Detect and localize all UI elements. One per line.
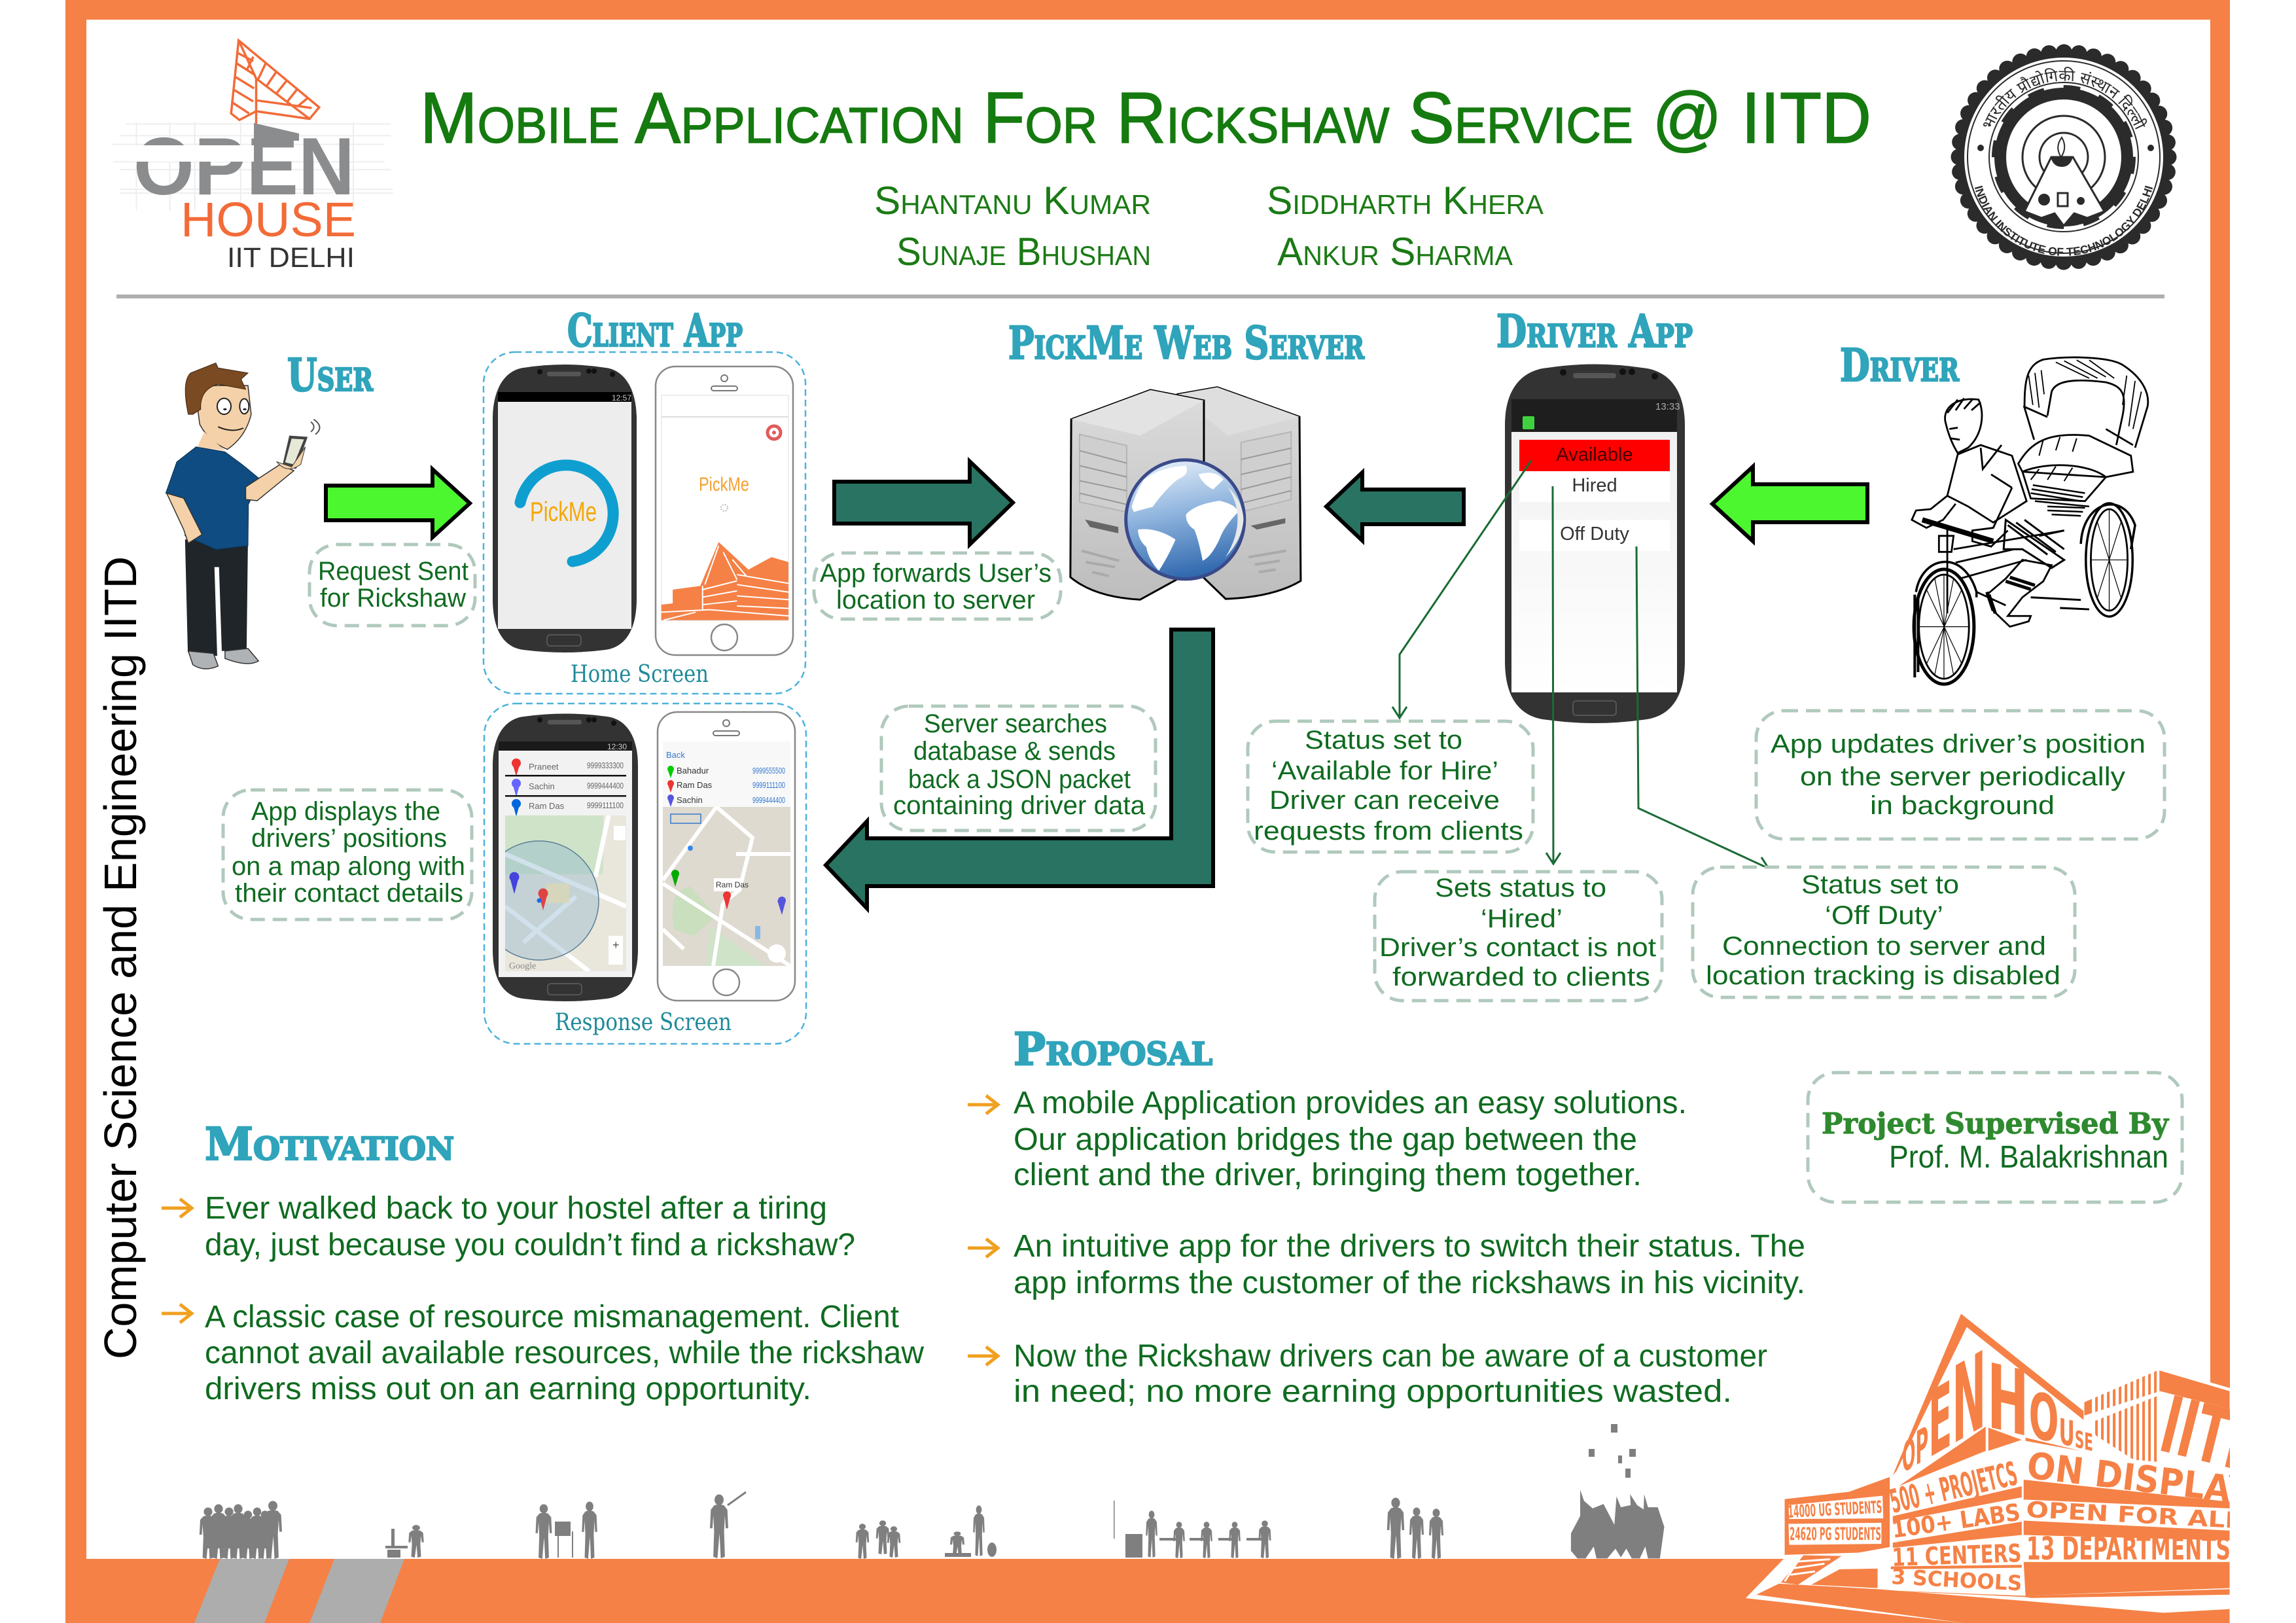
lowered arm and pocket hand <box>167 493 202 543</box>
authors: Shantanu Kumar <box>874 179 1151 223</box>
authors: Ankur Sharma <box>1277 230 1513 274</box>
android phone: home screen: PickMe <box>530 496 597 527</box>
silhouette: lab pair <box>536 1501 597 1559</box>
status button: hired: Hired <box>1572 475 1617 496</box>
silhouette: crowd <box>200 1501 282 1559</box>
arrow bullet <box>968 1347 998 1365</box>
driver list: 9999333300 <box>587 760 624 770</box>
heading: User: User <box>287 349 374 402</box>
contact list <box>666 750 785 807</box>
building lettering: 14000 UG STUDENTS <box>1788 1497 1882 1522</box>
frame <box>1939 528 2064 613</box>
callout: status available: Driver can receive <box>1269 786 1500 815</box>
ribbed wall <box>2092 1396 2159 1462</box>
silhouette: person at desk <box>385 1525 424 1558</box>
building lettering <box>1788 1327 2276 1596</box>
proposal point one <box>1014 1086 1687 1192</box>
callout: project supervisor <box>1808 1073 2182 1202</box>
callout: status available: ‘Available for Hire’ <box>1271 757 1498 785</box>
map <box>663 807 790 966</box>
map: + <box>612 938 620 952</box>
back right tower <box>1178 387 1301 599</box>
driver list <box>505 758 626 817</box>
arrow: client app to server <box>834 461 1013 544</box>
driver list: Praneet <box>529 762 559 772</box>
elbow arrow: server back to client <box>826 630 1213 908</box>
heading: PickMe Web Server: PickMe Web Server <box>1008 317 1365 370</box>
driver list: 9999111100 <box>587 800 624 810</box>
canopy <box>2024 357 2148 448</box>
building lettering: 11 CENTERS <box>1892 1539 2022 1572</box>
proposal point three: Now the Rickshaw drivers can be aware of a customer <box>1014 1339 1767 1374</box>
proposal point three <box>1014 1339 1767 1409</box>
status button: available <box>1519 440 1670 471</box>
section: motivation <box>162 1118 924 1406</box>
header divider <box>116 294 2164 298</box>
status button: off duty <box>1519 520 1670 551</box>
map <box>505 815 626 971</box>
building lettering: ON DISPLAY <box>2024 1444 2255 1514</box>
iPhone: home screen <box>656 366 793 655</box>
building lettering: 3 SCHOOLS <box>1891 1564 2022 1596</box>
motivation point one: day, just because you couldn’t find a rickshaw? <box>205 1228 855 1262</box>
contact list: Ram Das <box>677 780 713 790</box>
callout: app displays: drivers’ positions <box>251 824 447 853</box>
IIT Delhi seal: INDIAN INSTITUTE OF TECHNOLOGY DELHI <box>1975 186 2153 256</box>
callout: app updates <box>1756 711 2164 839</box>
authors: Siddharth Khera <box>1267 179 1544 223</box>
right block bands <box>2024 1480 2230 1508</box>
android phone: response screen <box>480 713 638 1001</box>
arrow: driver app to server <box>1326 473 1464 541</box>
IIT DELHI wordmark: IIT DELHI <box>227 242 355 274</box>
callout: status available <box>1248 721 1533 852</box>
motivation point one <box>205 1191 855 1262</box>
driver list: Sachin <box>529 781 555 791</box>
callout: project supervisor: Prof. M. Balakrishnan <box>1889 1140 2168 1175</box>
callout: app updates: App updates driver’s position <box>1771 730 2146 758</box>
connector: hired <box>1546 486 1561 864</box>
proposal point one: client and the driver, bringing them together. <box>1014 1158 1642 1192</box>
building lettering: 100+ LABS <box>1890 1499 2022 1544</box>
callout: status off duty: location tracking is disabled <box>1706 961 2060 990</box>
front left tower <box>1070 390 1204 599</box>
IIT Delhi seal: भारतीय प्रौद्योगिकी संस्थान दिल्ली <box>1983 67 2147 130</box>
driver shorts and leg <box>2004 520 2064 568</box>
vertical department label: Computer Science and Engineering IITD <box>95 556 146 1359</box>
callout: request sent: Request Sent <box>318 557 468 586</box>
hair <box>185 363 248 414</box>
callout: app displays: App displays the <box>251 797 440 826</box>
proposal point two <box>1014 1229 1805 1300</box>
phone <box>283 436 308 469</box>
icon: logo kite roof <box>231 41 319 135</box>
eyes and mouth <box>217 399 231 414</box>
callout: project supervisor: Project Supervised By <box>1822 1107 2169 1141</box>
callout: app updates: on the server periodically <box>1800 762 2125 791</box>
panel: home screen <box>484 352 805 694</box>
callout: server searches: database & sends <box>913 737 1116 766</box>
front wheel <box>1914 569 1974 684</box>
android phone: response screen: 12:30 <box>607 742 627 751</box>
heading: Driver App: Driver App <box>1496 306 1693 358</box>
callout: app displays: their contact details <box>235 879 463 908</box>
driver head <box>1945 399 1982 453</box>
grey footer stripes <box>194 1559 404 1623</box>
callout: status hired: ‘Hired’ <box>1481 904 1563 933</box>
heading: Driver: Driver <box>1840 340 1960 392</box>
proposal point two: app informs the customer of the rickshaws in his vicinity. <box>1014 1266 1805 1300</box>
building lettering: HOUSE <box>1987 1345 2093 1473</box>
building lettering: 500 + PROJETCS <box>1886 1455 2021 1521</box>
callout: app forwards <box>814 553 1061 619</box>
driver app phone: 13:33 <box>1655 401 1680 412</box>
silhouette: three students <box>1387 1498 1443 1559</box>
icon: user with phone <box>166 363 320 669</box>
motivation point one: Ever walked back to your hostel after a tiring <box>205 1191 827 1226</box>
callout: server searches: back a JSON packet <box>908 765 1131 794</box>
footer building illustration <box>1746 1313 2276 1623</box>
ground and plaza <box>1756 1584 2230 1623</box>
building lettering: 24620 PG STUDENTS <box>1790 1524 1881 1544</box>
OPEN wordmark: OPEN <box>133 122 355 212</box>
heading: Client App: Client App <box>567 305 743 357</box>
arrow: driver to driver app <box>1712 467 1867 541</box>
driver torso <box>1947 445 2026 522</box>
caption: response screen: Response Screen <box>555 1009 732 1036</box>
globe <box>1126 460 1245 579</box>
silhouette: readers <box>945 1505 997 1557</box>
arrow bullet <box>968 1239 998 1257</box>
contact list: 9999111100 <box>752 780 785 790</box>
icon: orange campus building <box>662 542 788 620</box>
proposal point two: An intuitive app for the drivers to switch their status. The <box>1014 1229 1805 1264</box>
icon: rickshaw driver line art <box>1912 357 2148 684</box>
callout: server searches <box>881 706 1156 830</box>
callout: status available: Status set to <box>1305 726 1462 755</box>
silhouette: lecturer pointing <box>710 1492 746 1558</box>
HOUSE wordmark: HOUSE <box>181 192 356 247</box>
lower block <box>1811 1569 1878 1588</box>
driver app phone <box>1505 364 1685 723</box>
motivation point two: drivers miss out on an earning opportunity. <box>205 1372 811 1406</box>
steps <box>1781 1556 1841 1585</box>
contact list: Back <box>666 750 685 760</box>
contact list: Bahadur <box>677 766 709 776</box>
motivation point two <box>205 1300 924 1406</box>
left block bands <box>1893 1486 2022 1522</box>
silhouette: graduates throwing caps <box>1571 1424 1665 1558</box>
android phone: home screen: 12:57 <box>612 393 631 402</box>
contact list: 9999444400 <box>752 795 785 805</box>
rear wheel <box>2086 503 2132 616</box>
silhouette: running children <box>856 1520 900 1559</box>
iPhone: response screen <box>658 712 795 1001</box>
callout: server searches: containing driver data <box>893 791 1146 820</box>
proposal point three: in need; no more earning opportunities wasted. <box>1014 1374 1732 1409</box>
iPhone: home screen: PickMe <box>699 474 749 495</box>
arrow: user to client app <box>326 469 470 537</box>
silhouette: classroom <box>1114 1501 1271 1558</box>
arrow bullet <box>968 1096 998 1114</box>
seat <box>2018 435 2133 477</box>
map: Google <box>509 961 536 971</box>
connector: available <box>1392 461 1531 718</box>
shoes <box>188 649 258 669</box>
driver list: Ram Das <box>529 801 565 811</box>
android phone: home screen <box>493 365 637 652</box>
motivation point two: cannot avail available resources, while the rickshaw <box>205 1336 924 1370</box>
shirt <box>166 447 260 550</box>
arrow bullet <box>162 1304 192 1323</box>
status button: off duty: Off Duty <box>1560 524 1629 544</box>
proposal point one: A mobile Application provides an easy solutions. <box>1014 1086 1687 1120</box>
authors: Sunaje Bhushan <box>896 230 1151 274</box>
proposal point one: Our application bridges the gap between the <box>1014 1122 1637 1157</box>
callout: request sent <box>309 544 475 626</box>
callout: status hired <box>1375 872 1662 1001</box>
app icon <box>1523 416 1534 429</box>
status button: available: Available <box>1556 444 1633 465</box>
face <box>197 385 251 450</box>
neck <box>198 432 225 451</box>
status button: hired <box>1519 471 1670 502</box>
motivation point two: A classic case of resource mismanagement. Client <box>205 1300 899 1334</box>
callout: app displays <box>223 790 472 919</box>
connector: off duty <box>1636 546 1769 868</box>
building lettering: OPEN FOR ALL <box>2026 1497 2242 1534</box>
arm <box>245 465 294 501</box>
callout: server searches: Server searches <box>924 709 1107 738</box>
callout: status off duty <box>1693 867 2075 997</box>
map: Ram Das <box>716 880 749 889</box>
callout: status off duty: ‘Off Duty’ <box>1825 901 1943 930</box>
callout: status hired: forwarded to clients <box>1392 963 1650 991</box>
IIT Delhi seal <box>1951 45 2176 270</box>
footer silhouettes <box>200 1424 1664 1559</box>
right tower roof <box>2084 1370 2230 1416</box>
callout: app forwards: App forwards User’s <box>820 559 1051 588</box>
title: Mobile Application For Rickshaw Service @ IITD <box>420 78 1871 158</box>
callout: status hired: Sets status to <box>1435 874 1606 902</box>
arrow bullet <box>162 1199 192 1217</box>
callout: status off duty: Status set to <box>1801 870 1959 899</box>
white cut-out <box>1746 1382 2230 1623</box>
driver list: 9999444400 <box>587 781 624 791</box>
contact list: 9999555500 <box>752 766 785 776</box>
trousers <box>185 539 248 656</box>
callout: status available: requests from clients <box>1254 817 1523 846</box>
callout: request sent: for Rickshaw <box>320 584 466 613</box>
callout: app displays: on a map along with <box>232 852 465 881</box>
heading: motivation: Motivation <box>205 1118 454 1171</box>
contact list: Sachin <box>677 795 703 805</box>
callout: app forwards: location to server <box>836 586 1035 615</box>
left annex <box>1785 1477 1890 1555</box>
section: proposal <box>968 1024 1805 1409</box>
authors <box>874 179 1544 274</box>
peak frame <box>1893 1313 2083 1475</box>
callout: app updates: in background <box>1870 791 2055 820</box>
under-peak triangles <box>1898 1427 1986 1486</box>
callout: status hired: Driver’s contact is not <box>1379 933 1656 962</box>
panel: response screen <box>480 704 806 1044</box>
Open House IIT Delhi logo <box>111 41 393 274</box>
callout: status off duty: Connection to server and <box>1722 932 2046 961</box>
heading: proposal: Proposal <box>1014 1024 1212 1076</box>
building lettering: OPEN <box>1902 1327 1986 1499</box>
caption: home screen: Home Screen <box>571 661 709 688</box>
icon: web server with globe <box>1070 387 1301 599</box>
